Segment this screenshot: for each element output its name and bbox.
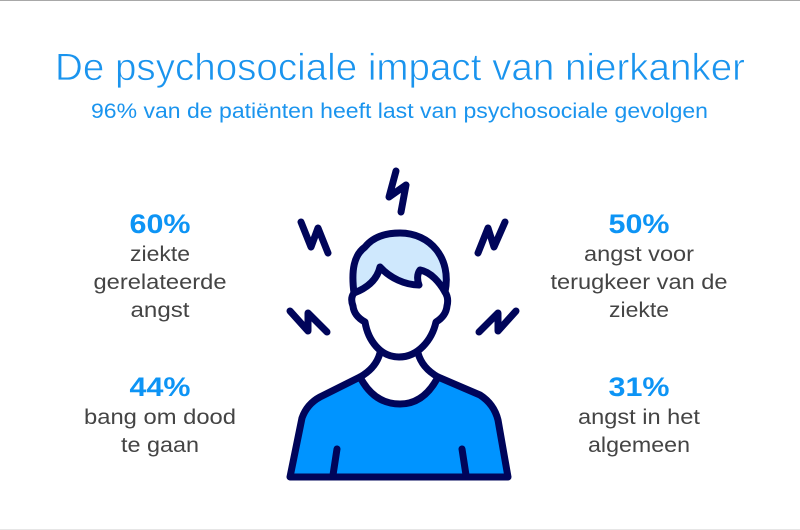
stat: 31% angst in het algemeen: 31%	[608, 372, 670, 402]
lightning bolt: lower left	[290, 311, 327, 332]
stat: 60% ziekte gerelateerde angst	[94, 209, 226, 322]
face	[352, 292, 448, 357]
stat: 44% bang om dood te gaan: bang om dood	[84, 406, 236, 429]
stat: 44% bang om dood te gaan	[84, 372, 236, 457]
stat: 50% angst voor terugkeer van de ziekte: angst voor	[584, 243, 694, 266]
neck	[360, 353, 438, 377]
stat: 50% angst voor terugkeer van de ziekte: terugkeer van de	[550, 271, 728, 294]
lightning bolt: lower right	[479, 311, 516, 332]
hair	[353, 233, 446, 293]
shirt	[290, 377, 508, 477]
lightning bolt: upper right	[478, 222, 505, 253]
stat: 50% angst voor terugkeer van de ziekte: ziekte	[609, 299, 669, 322]
stat: 60% ziekte gerelateerde angst: angst	[130, 299, 190, 322]
stat: 60% ziekte gerelateerde angst: gerelateerde	[94, 271, 226, 294]
stat: 60% ziekte gerelateerde angst: ziekte	[130, 243, 190, 266]
stat: 44% bang om dood te gaan: te gaan	[121, 434, 199, 457]
icon: stressed person	[290, 171, 516, 477]
lightning bolt: top	[389, 171, 406, 212]
lightning bolt: upper left	[301, 222, 328, 253]
stat: 31% angst in het algemeen: algemeen	[588, 434, 690, 457]
stat: 44% bang om dood te gaan: 44%	[130, 372, 190, 402]
stat: 50% angst voor terugkeer van de ziekte: 50%	[608, 209, 670, 239]
subtitle: 96% van de patiënten heeft last van psychosociale gevolgen	[91, 100, 708, 123]
title: De psychosociale impact van nierkanker	[55, 47, 745, 89]
stat: 50% angst voor terugkeer van de ziekte	[550, 209, 728, 322]
sleeves	[333, 449, 466, 475]
stat: 31% angst in het algemeen: angst in het	[578, 406, 700, 429]
stat: 31% angst in het algemeen	[578, 372, 700, 457]
stat: 60% ziekte gerelateerde angst: 60%	[130, 209, 190, 239]
